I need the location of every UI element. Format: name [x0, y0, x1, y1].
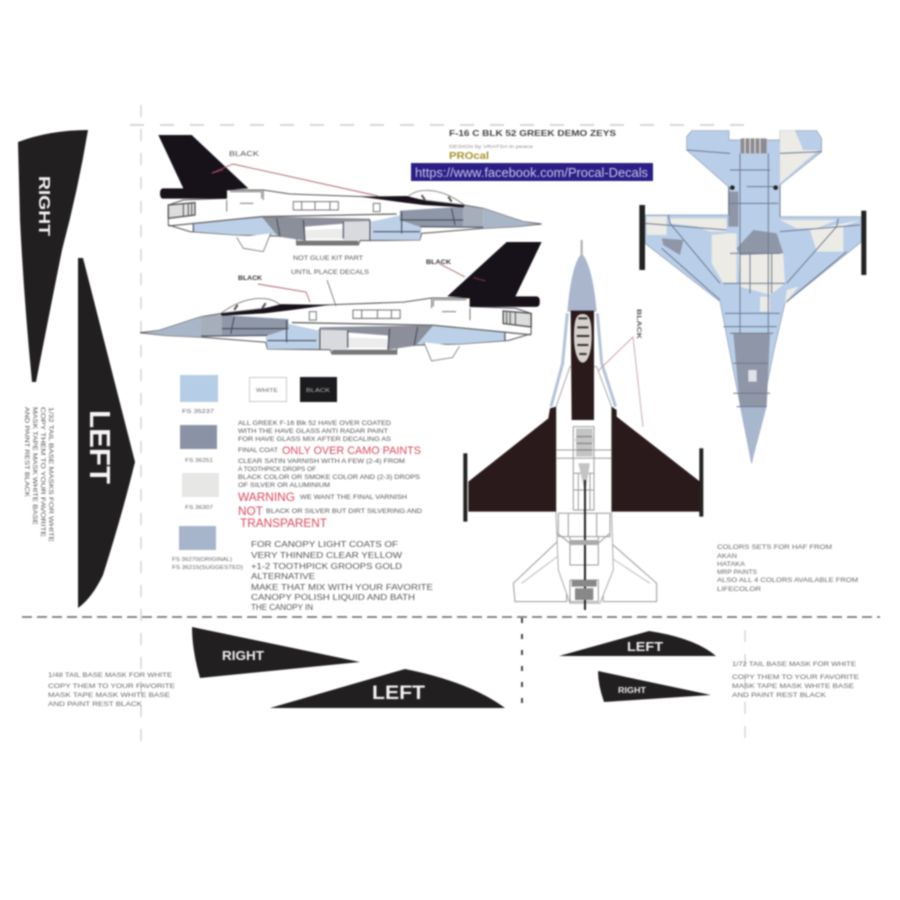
colour sets note: COLORS SETS FOR HAF FROM	[717, 545, 832, 551]
varnish instructions: OF SILVER OR ALUMINIUM	[238, 482, 330, 489]
tailplanes	[513, 542, 657, 602]
mask: vertical RIGHT tail base	[18, 130, 88, 382]
paint swatch: FS 36270 / 36215: FS 36270(ORIGINAL)	[172, 557, 232, 563]
canopy instructions	[251, 539, 433, 612]
light camouflage patches	[647, 131, 860, 312]
mask: vertical RIGHT tail base: RIGHT	[35, 176, 52, 236]
canopy instructions: FOR CANOPY LIGHT COATS OF	[251, 539, 398, 549]
note: 1/48 tail base mask	[48, 673, 175, 708]
jet labels: BLACK	[229, 149, 259, 158]
paint swatch: FS 36251: FS 36251	[185, 458, 213, 464]
note: 1/72 tail base mask: COPY THEM TO YOUR FAVORITE	[732, 675, 859, 681]
note: 1/32 tail base mask	[23, 407, 53, 542]
paint swatch: FS 36270 / 36215	[172, 526, 243, 571]
mask: 1/48 RIGHT: RIGHT	[222, 649, 264, 663]
mask: 1/48 RIGHT	[192, 627, 360, 678]
mask: 1/48 LEFT	[270, 669, 505, 708]
note: 1/72 tail base mask	[732, 662, 859, 699]
swatch: black: BLACK	[306, 388, 330, 394]
note: 1/48 tail base mask: 1/48 TAIL BASE MASK FOR WHITE	[48, 673, 172, 679]
title: F-16 C BLK 52 GREEK DEMO ZEYS	[449, 128, 616, 138]
note: 1/32 tail base mask: MASK TAPE MASK WHITE BASE	[31, 407, 37, 525]
paint swatch: FS 36307	[182, 473, 219, 511]
canopy instructions: MAKE THAT MIX WITH YOUR FAVORITE	[251, 582, 433, 592]
label and leader: top view black: BLACK	[635, 309, 642, 339]
colour sets note: ALSO ALL 4 COLORS AVAILABLE FROM	[717, 578, 858, 584]
side view jet: left-facing	[140, 242, 542, 361]
note: 1/32 tail base mask: 1/32 TAIL BASE MASKS FOR WHITE	[47, 407, 53, 542]
colour sets note: MRP PAINTS	[717, 570, 757, 576]
varnish instructions: NOT	[238, 504, 264, 518]
swatch: white: WHITE	[256, 388, 278, 394]
note: 1/32 tail base mask: AND PAINT REST BLACK	[23, 407, 29, 497]
designer credit: DESIGN by VRATSA in peace	[449, 144, 534, 149]
varnish instructions: TRANSPARENT	[240, 516, 328, 530]
mask: vertical LEFT tail base: LEFT	[83, 410, 115, 484]
varnish instructions: FINAL COAT	[238, 447, 278, 454]
note: 1/48 tail base mask: MASK TAPE MASK WHITE BASE	[48, 693, 170, 699]
varnish instructions: A TOOTHPICK DROPS OF	[238, 466, 316, 473]
varnish instructions: ALL GREEK F-16 Blk 52 HAVE OVER COATED	[238, 420, 391, 427]
canopy instructions: +1-2 TOOTHPICK GROOPS GOLD	[251, 561, 402, 571]
varnish instructions: BLACK OR SILVER BUT DIRT SILVERING AND	[266, 508, 422, 515]
side view jet: right-facing	[158, 135, 542, 252]
mask: 1/48 LEFT: LEFT	[372, 683, 425, 704]
silhouette	[645, 131, 862, 463]
swatch: white	[250, 378, 286, 402]
varnish instructions: FOR HAVE GLASS MIX AFTER DECALING AS	[238, 436, 391, 443]
note: 1/72 tail base mask: AND PAINT REST BLACK	[732, 693, 826, 699]
mask: 1/72 LEFT	[559, 631, 716, 656]
mask: vertical LEFT tail base	[78, 258, 135, 608]
forward fuselage sides	[551, 313, 616, 407]
label and leader: top view black	[598, 309, 643, 427]
jet labels: BLACK	[238, 276, 263, 282]
varnish instructions: ONLY OVER CAMO PAINTS	[282, 445, 421, 457]
canopy instructions: THE CANOPY IN	[251, 602, 313, 612]
canopy instructions: ALTERNATIVE	[251, 571, 315, 581]
paint swatch: FS 36307: FS 36307	[185, 505, 213, 511]
jet labels: NOT GLUE KIT PART	[293, 256, 363, 262]
cut guides	[22, 105, 880, 745]
note: 1/72 tail base mask: MASK TAPE MASK WHITE BASE	[732, 684, 854, 690]
canopy instructions: CANOPY POLISH LIQUID AND BATH	[251, 592, 415, 602]
canopy and spine	[571, 311, 594, 420]
varnish instructions: CLEAR SATIN VARNISH WITH A FEW (2-4) FROM	[238, 458, 405, 465]
colour sets note: LIFECOLOR	[717, 587, 762, 593]
wings	[468, 407, 556, 512]
varnish instructions: WARNING	[238, 490, 295, 504]
brand: PROcal: PROcal	[449, 151, 489, 162]
varnish instructions: BLACK COLOR OR SMOKE COLOR AND (2-3) DROPS	[238, 474, 420, 481]
top view jet	[463, 240, 703, 610]
paint swatch: FS 35237	[180, 375, 218, 415]
jet labels	[229, 149, 452, 282]
mask: 1/72 RIGHT: RIGHT	[618, 686, 646, 695]
wingtip rails	[463, 453, 467, 522]
canopy instructions: VERY THINNED CLEAR YELLOW	[251, 550, 403, 560]
mask: 1/72 LEFT: LEFT	[627, 639, 663, 654]
wingtip rails	[639, 205, 645, 270]
note: 1/72 tail base mask: 1/72 TAIL BASE MASK FOR WHITE	[732, 662, 856, 668]
jet labels: UNTIL PLACE DECALS	[291, 270, 369, 276]
panel lines	[645, 150, 860, 407]
facebook banner: https://www.facebook.com/Procal-Decals	[415, 165, 648, 180]
grey camouflage patches	[662, 192, 783, 407]
colour sets note: AKAN	[717, 554, 737, 560]
colour sets note: HATAKA	[717, 562, 745, 568]
bottom view jet	[639, 131, 866, 463]
paint swatch: FS 36251	[180, 425, 217, 464]
colour sets note	[717, 545, 858, 593]
note: 1/48 tail base mask: COPY THEM TO YOUR FAVORITE	[48, 684, 175, 690]
exhaust	[741, 138, 767, 153]
jet labels: BLACK	[426, 260, 452, 266]
rear fuselage	[556, 367, 613, 603]
swatch: black	[300, 377, 337, 402]
varnish instructions: WE WANT THE FINAL VARNISH	[300, 494, 407, 501]
varnish instructions: WITH THE HAVE GLASS ANTI RADAR PAINT	[238, 428, 388, 435]
mask: 1/72 RIGHT	[598, 671, 711, 702]
note: 1/32 tail base mask: COPY THEM TO YOUR FAVORITE	[39, 407, 45, 537]
paint swatch: FS 35237: FS 35237	[182, 409, 214, 415]
varnish instructions	[238, 420, 422, 530]
note: 1/48 tail base mask: AND PAINT REST BLACK	[48, 702, 142, 708]
paint swatch: FS 36270 / 36215: FS 36215(SUGGESTED)	[172, 565, 243, 571]
leader lines: side views	[212, 164, 465, 306]
